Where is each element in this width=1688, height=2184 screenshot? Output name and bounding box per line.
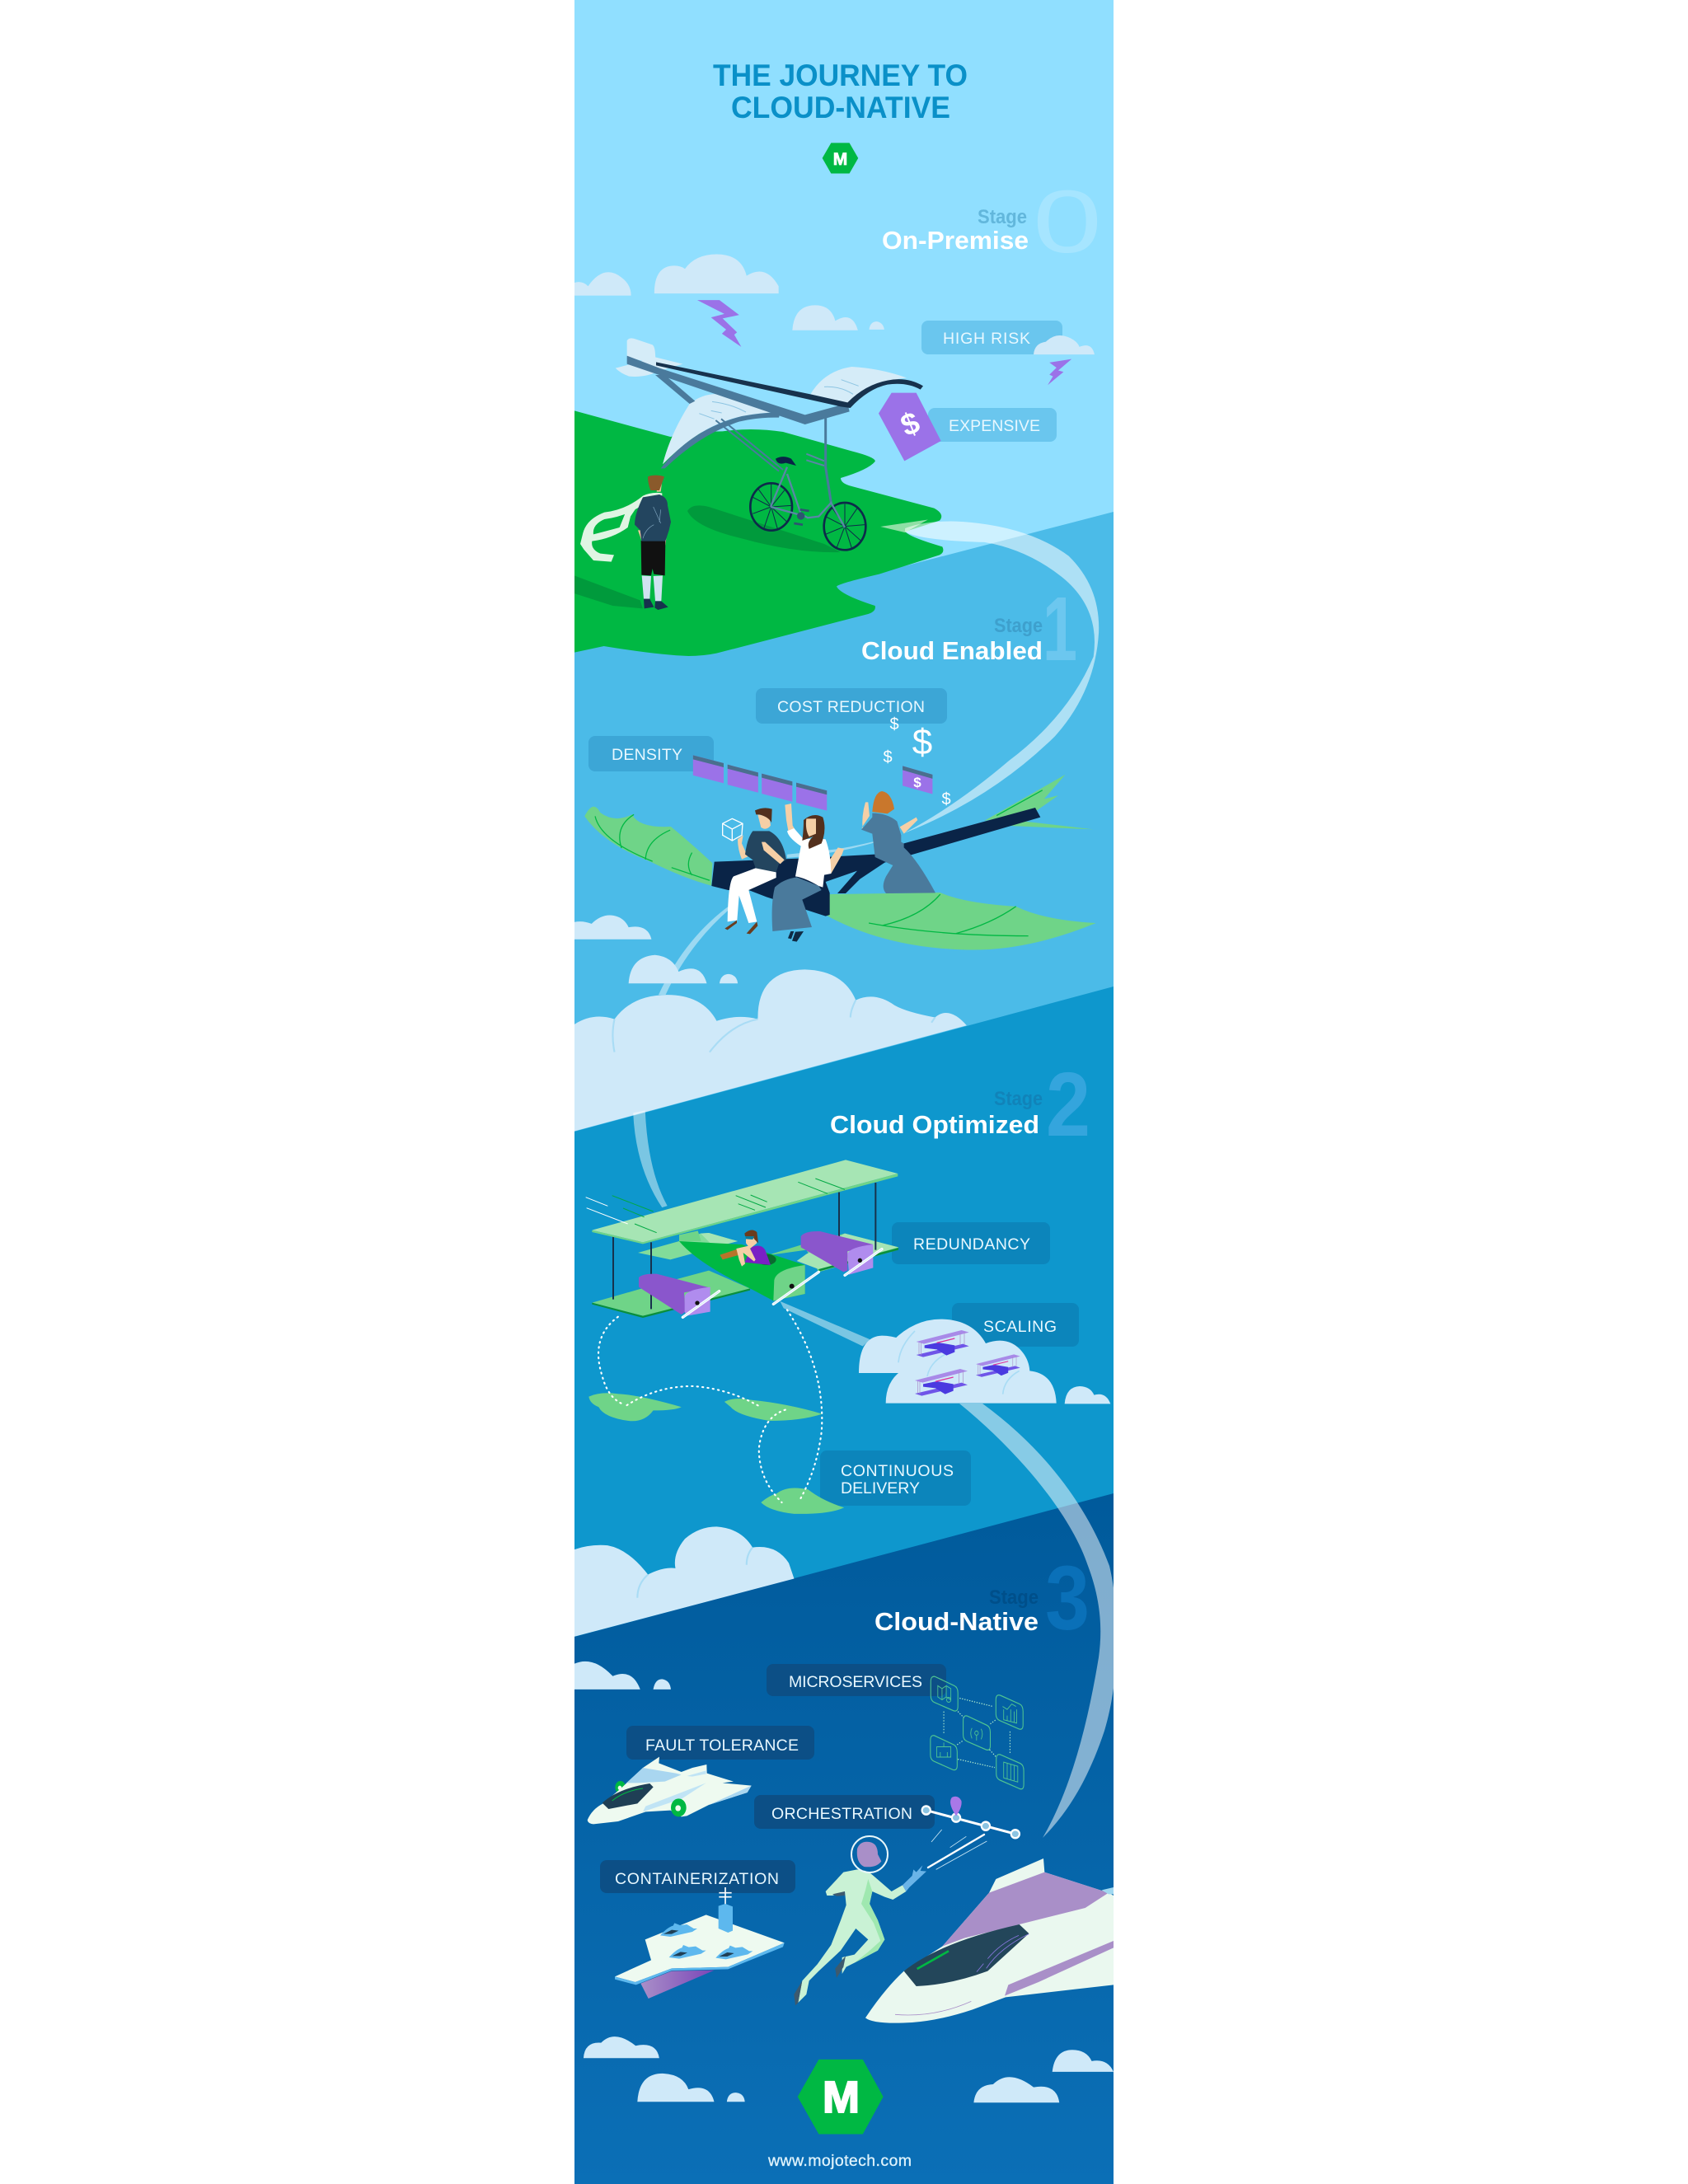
label: cost reduction: COST REDUCTION [777, 698, 925, 716]
stage 2 heading: 2 [1046, 1054, 1090, 1155]
stage 0 heading: 0 [1033, 171, 1102, 271]
motion lines [928, 1835, 984, 1868]
stage 0 clouds and lightning [574, 255, 1095, 385]
label: high risk [921, 321, 1062, 354]
panel: stage 3 background [574, 1493, 1114, 2184]
stage 0 heading: Stage [978, 206, 1027, 228]
label: microservices [767, 1664, 946, 1696]
label: redundancy [892, 1222, 1050, 1264]
microservices diagram [931, 1676, 1024, 1789]
contrail: middle swoosh [633, 1110, 870, 1347]
stage 0 heading [883, 190, 1097, 253]
panel: stage 0 sky [574, 0, 1114, 567]
label: continuous delivery: DELIVERY [841, 1479, 920, 1497]
label: containerization: CONTAINERIZATION [615, 1870, 779, 1888]
infographic panel [574, 0, 1117, 2184]
stage 3 heading: 3 [1045, 1548, 1090, 1649]
label: microservices: MICROSERVICES [789, 1673, 922, 1691]
clouds [574, 916, 738, 983]
stage 3 clouds, microservices, orchestration, logo [574, 1661, 1114, 2135]
person: woman in blue dress [861, 791, 935, 893]
container blocks [693, 755, 932, 811]
label: fault tolerance: FAULT TOLERANCE [645, 1736, 799, 1755]
biplane [586, 1160, 898, 1318]
contrail: upper swoosh [659, 520, 1099, 995]
stage 1 clouds, blocks and leaf wings [574, 755, 1096, 983]
small jet: fault tolerance [588, 1757, 752, 1824]
person: man with cube [723, 808, 786, 934]
label: orchestration [754, 1795, 935, 1829]
stage 3 heading: Cloud-Native [874, 1607, 1039, 1636]
bicycle [750, 454, 865, 550]
title [713, 64, 966, 119]
panel: stage 1 background [574, 512, 1114, 1132]
label: density: DENSITY [612, 746, 682, 764]
icon: small hexagon logo [823, 143, 858, 173]
label: expensive: EXPENSIVE [949, 417, 1040, 435]
carrier ship [615, 1887, 785, 1999]
website url: www.mojotech.com [767, 2152, 912, 2170]
label: cost reduction [756, 688, 947, 724]
contrail: lower swoosh [959, 1404, 1117, 1838]
hang glider [616, 338, 923, 503]
astronaut [794, 1836, 926, 2005]
stage 2 heading: Cloud Optimized [830, 1110, 1039, 1139]
label: redundancy: REDUNDANCY [913, 1235, 1030, 1254]
text: dollar signs: $ [889, 715, 899, 733]
scaling clouds [859, 1319, 1110, 1404]
icon: large hexagon logo [798, 2060, 884, 2135]
dotted flight paths [598, 1310, 822, 1502]
label: expensive [928, 408, 1057, 442]
text: dollar signs: $ [883, 748, 893, 766]
icon: price tag [879, 393, 941, 461]
stage 0 scene: hill, glider, bicycle, man [574, 338, 943, 656]
text: logo letter: M [823, 2073, 860, 2122]
title: THE JOURNEY TO [713, 59, 968, 92]
stage 2 heading [831, 1071, 1087, 1139]
orchestration line [922, 1797, 1020, 1838]
astronaut and spaceship [794, 1830, 1114, 2023]
small jet and carrier [588, 1757, 785, 1999]
stage 3 heading [874, 1548, 1090, 1649]
green islands [588, 1393, 844, 1514]
cloud band between stages 2 and 3 [574, 1526, 794, 1637]
label: continuous delivery: CONTINUOUS [841, 1462, 954, 1480]
title: CLOUD-NATIVE [731, 91, 950, 124]
label: high risk: HIGH RISK [943, 330, 1030, 348]
icon: small hexagon logo: M [833, 150, 847, 169]
stage 1 heading: Stage [994, 615, 1043, 637]
icon: lightning bolts [697, 300, 1071, 385]
aircraft fuselage [711, 808, 1040, 916]
mini biplanes [915, 1330, 1020, 1396]
green hill [574, 410, 943, 656]
stage 2 heading: Stage [994, 1088, 1043, 1110]
clouds [574, 1661, 1114, 2102]
label: fault tolerance [626, 1726, 814, 1760]
text: dollar signs: $ [941, 790, 951, 808]
text: dollar signs [883, 715, 951, 808]
label: continuous delivery [820, 1451, 971, 1506]
stage 1 heading [862, 598, 1076, 660]
stage 1 heading: 1 [1043, 579, 1077, 680]
label: density [588, 736, 714, 771]
leaf veins [595, 790, 1043, 936]
big spaceship [865, 1858, 1114, 2023]
text: dollar signs: $ [913, 775, 921, 790]
hill shadows [574, 505, 841, 608]
panel: stage 2 background [574, 987, 1114, 1637]
thin motion lines [931, 1830, 987, 1869]
stage 1 heading: Cloud Enabled [861, 636, 1043, 665]
man with scarf [580, 476, 671, 610]
label: containerization [600, 1860, 795, 1893]
leaf wings and tail [584, 775, 1096, 950]
label: orchestration: ORCHESTRATION [771, 1805, 912, 1823]
clouds [574, 255, 1095, 354]
cloud band between stages 1 and 2 [574, 969, 967, 1132]
text: price tag dollar: $ [896, 405, 925, 443]
stage 1 scene: aircraft and passengers [711, 791, 1040, 942]
stage 3 heading: Stage [989, 1586, 1039, 1609]
stage 0 heading: On-Premise [882, 226, 1029, 255]
label: scaling [952, 1303, 1079, 1347]
person: woman in white [772, 804, 844, 942]
text: dollar signs: $ [912, 722, 932, 762]
label: scaling: SCALING [983, 1318, 1057, 1336]
stage 2 lower scene [588, 1110, 870, 1514]
